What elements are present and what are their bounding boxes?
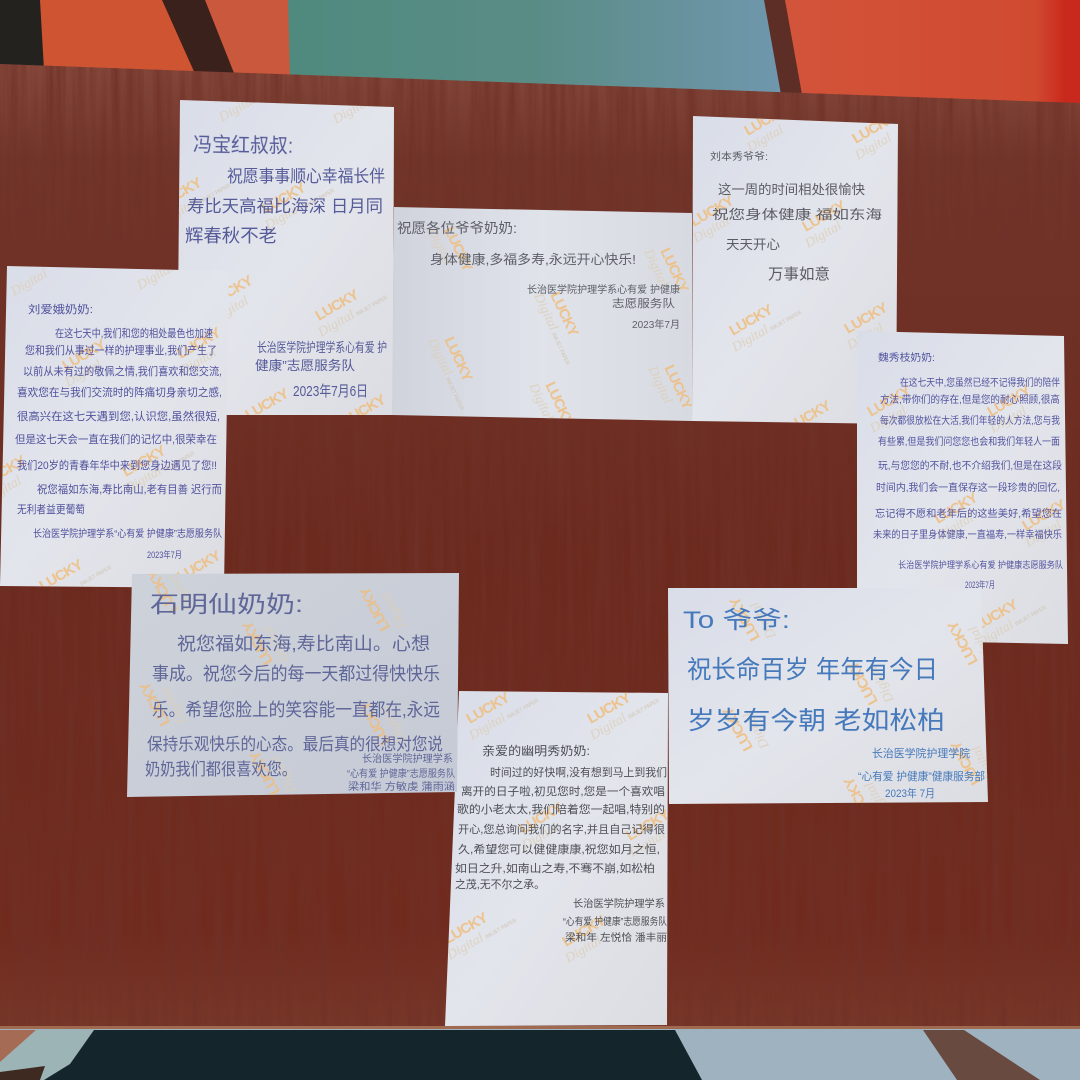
watermarks: card B: Digital <box>122 464 165 497</box>
message: 每次都很放松在大活,我们年轻的人方法,您与我 <box>880 414 1060 427</box>
watermarks: card F: LUCKY <box>719 704 757 754</box>
watermarks: card F: Digital <box>741 709 773 752</box>
watermarks: card D: INKJET PAPER <box>769 310 803 333</box>
watermarks: card C: Digital <box>640 246 671 289</box>
watermarks: card B: INKJET PAPER <box>79 565 113 588</box>
message: 乐。希望您脸上的笑容能一直都在,永远 <box>152 700 440 720</box>
watermarks: card D: LUCKY <box>849 109 899 147</box>
watermarks: card C: LUCKY <box>542 379 577 430</box>
card: to grandpa <box>668 588 988 804</box>
card: Shi Mingxian <box>127 559 459 804</box>
watermarks: card D: Digital <box>729 323 772 356</box>
watermarks: card B: LUCKY <box>59 336 109 374</box>
watermarks: card F: LUCKY <box>947 738 985 788</box>
watermarks: card A: Digital <box>330 95 372 128</box>
message <box>455 765 667 891</box>
watermarks: card C: LUCKY <box>441 224 476 275</box>
watermarks: card F: Digital <box>748 599 780 642</box>
watermarks: card C: LUCKY <box>547 289 582 340</box>
message: 未来的日子里身体健康,一直福寿,一样幸福快乐 <box>873 528 1062 541</box>
watermarks: card D: LUCKY <box>841 299 891 337</box>
signature: 2023年7月 <box>147 549 182 560</box>
message: 但是这七天会一直在我们的记忆中,很荣幸在 <box>15 432 217 446</box>
signature <box>898 559 1063 590</box>
watermarks: card F <box>722 599 988 803</box>
watermarks: card G: Digital <box>562 934 605 967</box>
watermarks: card C: INKJET PAPER <box>444 377 464 412</box>
message: 这一周的时间相处很愉快 <box>718 182 865 197</box>
watermarks: card H: LUCKY <box>356 584 394 634</box>
message <box>873 376 1062 541</box>
watermarks: card C: INKJET PAPER <box>550 332 570 367</box>
message: 无利者益更葡萄 <box>17 502 85 516</box>
watermarks: card E: LUCKY <box>971 596 1021 634</box>
watermarks: card A: Digital <box>216 93 258 126</box>
watermarks: card E: Digital <box>934 511 977 544</box>
signature <box>527 283 680 331</box>
watermarks: card G: LUCKY <box>463 689 513 727</box>
signature: 梁和华 方敏虔 蒲雨涵 <box>348 780 455 793</box>
watermarks: card G: Digital <box>519 821 562 854</box>
signature: 梁和年 左悦恰 潘丰丽 <box>565 931 667 944</box>
watermarks: card H: LUCKY <box>144 566 182 616</box>
signature: 健康”志愿服务队 <box>255 358 355 373</box>
signature: 长治医学院护理学系“心有爱 护健康”志愿服务队 <box>33 527 222 540</box>
watermarks: card F: LUCKY <box>726 594 764 644</box>
card: Wei Xiuzhi <box>857 331 1077 651</box>
greeting: 刘本秀爷爷: <box>710 150 768 163</box>
watermarks: card G: Digital <box>444 931 487 964</box>
watermarks: card F: LUCKY <box>840 774 878 824</box>
watermarks: card B: INKJET PAPER <box>162 451 196 474</box>
greeting: 石明仙奶奶: <box>150 591 303 617</box>
watermarks: card A: Digital <box>315 308 358 341</box>
message: 玩,与您您的不耐,也不介绍我们,但是在这段 <box>878 459 1062 472</box>
message: 方法,带你们的存在,但是您的耐心照顾,很高 <box>880 393 1060 406</box>
watermarks: card B: LUCKY <box>119 442 169 480</box>
greeting: 刘爱娥奶奶: <box>28 302 93 316</box>
signature: “心有爱 护健康”志愿服务队 <box>563 915 667 928</box>
watermarks: card A: LUCKY <box>259 179 309 217</box>
message: 保持乐观快乐的心态。最后真的很想对您说 <box>147 735 443 754</box>
watermarks: card A: LUCKY <box>312 286 362 324</box>
watermarks: card H: LUCKY <box>246 748 284 798</box>
message: 奶奶我们都很喜欢您。 <box>145 760 297 779</box>
watermarks: card F: Digital <box>862 779 894 822</box>
watermarks: card E: Digital <box>867 404 910 437</box>
signature: 2023年 7月 <box>885 786 935 800</box>
signature: 长治医学院护理学院 <box>872 746 970 760</box>
watermarks: card A: LUCKY <box>206 272 256 310</box>
watermarks: card B: Digital <box>177 346 220 379</box>
message: 久,希望您可以健健康康,祝您如月之恒, <box>458 842 660 856</box>
message: 天天开心 <box>726 237 780 252</box>
message: 寿比天高福比海深 日月同 <box>187 197 383 216</box>
watermarks: card H <box>139 574 406 795</box>
greeting: 祝愿各位爷爷奶奶: <box>397 220 517 236</box>
watermarks: card E: LUCKY <box>931 489 981 527</box>
watermarks: card A: INKJET PAPER <box>302 188 336 211</box>
watermarks: card D: LUCKY <box>799 197 849 235</box>
watermarks: card D: LUCKY <box>687 192 737 230</box>
watermarks: card D: Digital <box>852 131 895 164</box>
watermarks: card B: LUCKY <box>36 556 86 594</box>
watermarks: card B: LUCKY <box>174 324 224 362</box>
watermarks: card E: Digital <box>987 404 1030 437</box>
watermarks: card C <box>428 226 692 419</box>
message: 离开的日子啦,初见您时,您是一个喜欢唱 <box>461 784 665 798</box>
signature: 长治医学院护理学系 <box>573 897 665 910</box>
card: Feng Baohong <box>178 100 394 415</box>
watermarks: card G: LUCKY <box>516 799 566 837</box>
watermarks: card G <box>448 692 668 963</box>
message: 歌的小老太太,我们陪着您一起唱,特别的 <box>457 802 665 816</box>
watermarks: card G: LUCKY <box>623 806 673 844</box>
signature <box>33 527 222 560</box>
message <box>185 167 385 246</box>
message: 祝您福如东海,寿比南山。心想 <box>177 634 430 654</box>
message: 祝愿事事顺心幸福长伴 <box>227 167 385 186</box>
message: 万事如意 <box>768 265 830 283</box>
watermarks: card F: LUCKY <box>944 618 982 668</box>
greeting: 魏秀枝奶奶: <box>878 351 935 364</box>
watermarks: card E <box>866 384 1064 642</box>
watermarks: card G: LUCKY <box>559 912 609 950</box>
watermarks: card F: LUCKY <box>844 658 882 708</box>
signature: 长治医学院护理学系心有爱 护 <box>257 340 387 355</box>
watermarks: card D: Digital <box>744 123 787 156</box>
signature: 志愿服务队 <box>612 296 675 310</box>
watermarks: card H: LUCKY <box>356 698 394 748</box>
signature <box>347 752 455 793</box>
message: 时间过的好快啊,没有想到马上到我们 <box>490 765 667 779</box>
message: 祝您福如东海,寿比南山,老有目善 迟行而 <box>37 482 222 496</box>
message <box>145 634 443 779</box>
message: 身体健康,多福多寿,永远开心快乐! <box>430 252 636 267</box>
message: 在这七天中,我们和您的相处最色也加速 <box>55 326 213 340</box>
watermarks: card H: Digital <box>158 684 190 727</box>
watermarks: card A: Digital <box>262 201 305 234</box>
watermarks: card C: Digital <box>530 290 561 333</box>
watermarks: card C: Digital <box>424 335 455 378</box>
watermarks: card B: LUCKY <box>174 547 224 585</box>
signature <box>255 340 387 400</box>
message: 开心,您总询问我们的名字,并且自己记得很 <box>458 822 665 836</box>
watermarks: card G: Digital <box>626 828 669 861</box>
message: 如日之升,如南山之寿,不骞不崩,如松柏 <box>455 861 655 875</box>
watermarks: card C: LUCKY <box>657 245 692 296</box>
watermarks: card A: INKJET PAPER <box>355 295 389 318</box>
watermarks: card D: LUCKY <box>726 301 776 339</box>
message: 时间内,我们会一直保存这一段珍贵的回忆, <box>876 481 1060 494</box>
watermarks: card G: INKJET PAPER <box>484 918 518 941</box>
watermarks: card C: Digital <box>644 363 675 406</box>
watermarks: card D: LUCKY <box>741 101 791 139</box>
watermarks: card C: LUCKY <box>441 334 476 385</box>
watermarks: card H: LUCKY <box>136 679 174 729</box>
message: 忘记得不愿和老年后的这些美好,希望您在 <box>875 507 1062 520</box>
greeting: 亲爱的幽明秀奶奶: <box>482 743 590 758</box>
message <box>15 326 222 516</box>
watermarks: card D: Digital <box>690 214 733 247</box>
watermarks: card E: Digital <box>974 618 1017 651</box>
watermarks: card H: Digital <box>378 703 410 746</box>
watermarks: card D: Digital <box>844 321 887 354</box>
message: 以前从未有过的敬佩之情,我们喜欢和您交流, <box>23 364 222 378</box>
signature: 2023年7月 <box>965 579 995 590</box>
watermarks: card F: Digital <box>969 743 1001 786</box>
message: 岁岁有今朝 老如松柏 <box>687 707 945 735</box>
watermarks: card G: INKJET PAPER <box>627 698 661 721</box>
watermarks: card G: Digital <box>466 711 509 744</box>
watermarks: card C: LUCKY <box>661 362 696 413</box>
watermarks: card F: Digital <box>866 663 898 706</box>
greeting: 冯宝红叔叔: <box>193 133 293 158</box>
message: 在这七天中,您虽然已经不记得我们的陪伴 <box>900 376 1060 389</box>
signature <box>858 746 985 800</box>
watermarks: card D: LUCKY <box>784 397 834 435</box>
watermarks: card A: LUCKY <box>339 391 389 429</box>
watermarks: card A: LUCKY <box>155 174 205 212</box>
watermarks: card A <box>178 102 388 415</box>
watermarks: card H: LUCKY <box>239 618 277 668</box>
watermarks: card H: Digital <box>261 623 293 666</box>
watermarks: card G: LUCKY <box>584 689 634 727</box>
watermarks: card G: INKJET PAPER <box>506 698 540 721</box>
card: You Mingxiu <box>445 691 668 1026</box>
watermarks: card E: LUCKY <box>1019 496 1069 534</box>
message <box>687 656 945 735</box>
signature: 2023年7月6日 <box>293 383 368 400</box>
watermarks: card B: Digital <box>62 358 105 391</box>
message: 您和我们从事过一样的护理事业,我们产生了 <box>25 343 217 357</box>
watermarks: card G: LUCKY <box>441 909 491 947</box>
watermarks: card E: INKJET PAPER <box>1014 605 1048 628</box>
watermarks: card B <box>2 268 219 586</box>
watermarks: card F: Digital <box>966 623 998 666</box>
watermarks: card C: Digital <box>424 225 455 268</box>
watermarks: card C: Digital <box>525 380 556 423</box>
watermarks: card A: Digital <box>209 294 252 327</box>
signature <box>563 897 667 944</box>
message: 很高兴在这七天遇到您,认识您,虽然很短, <box>17 409 220 423</box>
greeting: To 爷爷: <box>683 607 790 634</box>
signature: 2023年7月 <box>632 318 680 331</box>
watermarks: card H: Digital <box>378 589 410 632</box>
watermarks: card E: Digital <box>1022 518 1065 551</box>
watermarks: card E: LUCKY <box>864 382 914 420</box>
signature: 长治医学院护理学系 <box>362 752 453 765</box>
watermarks: card D: Digital <box>802 219 845 252</box>
card: Liu Benxiu <box>692 116 898 424</box>
card: to all grandparents <box>392 207 696 436</box>
message: 祝长命百岁 年年有今日 <box>687 656 938 684</box>
watermarks: card H: Digital <box>166 571 198 614</box>
message: 之茂,无不尔之承。 <box>455 877 545 891</box>
card: Liu Aie <box>0 261 232 606</box>
message: 喜欢您在与我们交流时的阵痛切身亲切之感, <box>17 385 222 399</box>
watermarks: card A: INKJET PAPER <box>198 183 232 206</box>
watermarks: card H: Digital <box>268 753 300 796</box>
watermarks: card B: Digital <box>134 261 176 294</box>
signature: 长治医学院护理学系心有爱 护健康 <box>527 283 680 296</box>
watermarks: card A: Digital <box>158 196 201 229</box>
message: 我们20岁的青春年华中来到您身边遇见了您!! <box>17 458 217 472</box>
message: 有些累,但是我们问您您也会和我们年轻人一面 <box>878 435 1060 448</box>
signature: 长治医学院护理学系心有爱 护健康志愿服务队 <box>898 559 1063 570</box>
watermarks: card E: LUCKY <box>984 382 1034 420</box>
watermarks: card A: LUCKY <box>242 385 292 423</box>
signature: “心有爱 护健康”志愿服务队 <box>347 767 455 780</box>
message: 事成。祝您今后的每一天都过得快快乐 <box>152 664 440 684</box>
watermarks: card G: Digital <box>587 711 630 744</box>
watermarks: card D <box>692 118 892 423</box>
watermarks: card B: Digital <box>8 267 50 300</box>
message: 辉春秋不老 <box>185 226 277 246</box>
message: 祝您身体健康 福如东海 <box>712 207 882 222</box>
signature: “心有爱 护健康”健康服务部 <box>858 769 985 783</box>
message <box>712 182 882 283</box>
